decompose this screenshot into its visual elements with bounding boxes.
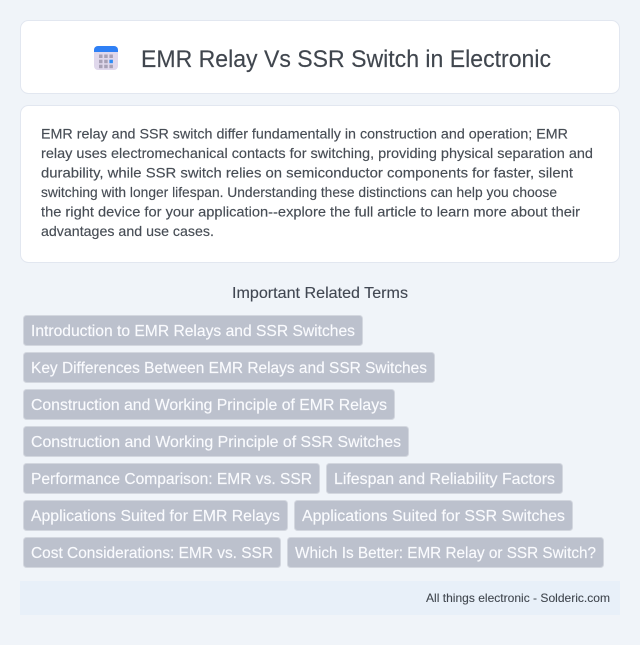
chip: SSR construction: Construction and Working Principle of SSR Switches xyxy=(31,434,401,451)
text block: summary paragraph: relay uses electromechanical contacts for switching, providing physical separation and xyxy=(41,145,593,161)
text block: summary paragraph: switching with longer lifespan. Understanding these distinctions can help you choose xyxy=(41,184,557,200)
chip: key differences xyxy=(24,352,434,382)
chip: lifespan: Lifespan and Reliability Factors xyxy=(334,471,555,488)
title: EMR Relay Vs SSR Switch in Electronic xyxy=(141,46,551,73)
chip: introduction xyxy=(24,316,362,346)
text block: summary paragraph: durability, while SSR switch relies on semiconductor components for faster, silent xyxy=(41,164,573,180)
chip: SSR applications: Applications Suited for SSR Switches xyxy=(302,508,565,525)
chip: EMR construction: Construction and Working Principle of EMR Relays xyxy=(31,397,387,414)
chip: cost xyxy=(24,538,280,568)
chip: lifespan xyxy=(326,464,562,494)
text block: summary paragraph: EMR relay and SSR switch differ fundamentally in construction and operation; EMR xyxy=(41,126,568,142)
list: related term chips xyxy=(24,316,604,568)
footer xyxy=(20,581,620,615)
text block: summary paragraph xyxy=(41,126,593,239)
chip: which is better: Which Is Better: EMR Relay or SSR Switch? xyxy=(295,545,596,562)
panel: header xyxy=(20,20,620,94)
heading: related terms: Important Related Terms xyxy=(232,285,408,302)
chip: which is better xyxy=(288,538,604,568)
footer credit: All things electronic - Solderic.com xyxy=(426,591,610,605)
chip: introduction: Introduction to EMR Relays and SSR Switches xyxy=(31,323,355,340)
chip: EMR construction xyxy=(24,390,394,420)
chip: performance: Performance Comparison: EMR vs. SSR xyxy=(31,471,312,488)
icon: calendar xyxy=(94,46,118,70)
text block: summary paragraph: the right device for your application--explore the full article to learn more about their xyxy=(41,204,580,220)
text block: summary paragraph: advantages and use cases. xyxy=(41,223,214,239)
chip: EMR applications xyxy=(24,500,288,530)
chip: SSR applications xyxy=(294,500,572,530)
chip: EMR applications: Applications Suited for EMR Relays xyxy=(31,508,280,525)
chip: SSR construction xyxy=(24,426,408,456)
panel: summary xyxy=(20,106,620,262)
chip: key differences: Key Differences Between EMR Relays and SSR Switches xyxy=(31,360,427,377)
chip: performance xyxy=(24,464,320,494)
chip: cost: Cost Considerations: EMR vs. SSR xyxy=(31,545,273,562)
